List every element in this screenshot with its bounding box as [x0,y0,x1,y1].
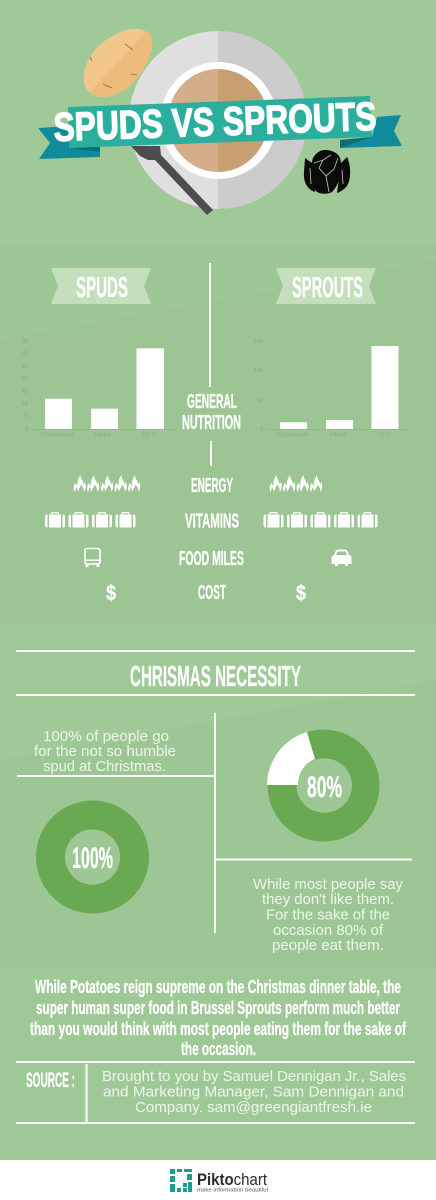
donut chart: 80 percent: 80% [307,771,342,804]
banner ribbon with title [38,95,402,159]
donut chart: 100 percent [50,815,134,899]
bar chart: sprouts: POTASSIUM [276,432,308,438]
label: energy: ENERGY [191,475,233,497]
icon: bus [85,548,100,567]
text: sprouts note: For the sake of the [266,908,390,924]
icons: spuds vitamin cases [45,512,136,528]
panel: comparison [22,263,410,605]
text: sprouts note: While most people say [253,877,404,893]
bar chart: sprouts: 0 [260,427,263,433]
icon: plate with soup [129,31,307,209]
panel: summary and source: SOURCE : [26,1069,75,1092]
text: spuds note [34,729,176,775]
bar chart: spuds: 25 [22,364,28,370]
ribbon heading: sprouts [276,268,376,304]
logo tagline: make information beautiful [197,1188,268,1194]
panel: christmas necessity [16,650,415,954]
footer: piktochart logo [170,1169,268,1194]
text: credits: Brought to you by Samuel Dennigan Jr., Sales [102,1069,406,1085]
text: credits: Company. sam@greengiantfresh.ie [135,1100,372,1116]
bar chart: spuds: 30 [22,351,28,357]
bar chart: sprouts: 50 [257,398,263,404]
bar chart: spuds: FIBER [95,432,111,438]
panel: summary and source [16,976,415,1124]
icon: logo mark [170,1169,192,1192]
label: general nutrition: GENERAL [187,391,237,413]
text: sprouts note [253,877,404,954]
bar chart: spuds: VIT C [142,432,156,438]
logo wordmark: Piktochart [197,1171,267,1189]
bar chart: spuds: 15 [22,389,28,395]
donut chart: 80 percent [267,732,365,827]
bar chart: sprouts [254,339,410,438]
text: conclusion: the occasion. [181,1038,256,1059]
icon: sprout [304,150,350,194]
label: vitamins: VITAMINS [185,510,239,532]
bar chart: sprouts: VIT C [377,432,391,438]
icon: potato [84,29,152,97]
icon: fork [131,146,213,215]
label: cost: COST [198,582,226,604]
bar chart: spuds: 10 [22,401,28,407]
bar chart: sprouts: 150 [254,339,263,345]
label: general nutrition [182,391,241,434]
label: food miles: FOOD MILES [179,548,244,570]
header illustration [38,29,402,215]
bar chart: spuds: 35 [22,339,28,345]
text: sprouts note: they don't like them. [262,892,394,908]
bar chart: sprouts: 100 [254,368,263,374]
bar chart: spuds: 0 [25,427,28,433]
icons: spuds energy flames [74,475,140,492]
text: sprouts note: people eat them. [272,938,384,954]
bar chart: sprouts: FIBER [330,432,346,438]
label: general nutrition: NUTRITION [182,412,241,434]
ribbon heading: spuds: SPUDS [76,272,128,304]
text: spuds note: for the not so humble [34,744,176,760]
text: sprouts note: occasion 80% of [273,923,384,939]
icons: sprouts vitamin cases [264,512,378,528]
text: spuds note: 100% of people go [43,729,169,745]
text: credits: and Marketing Manager, Sam Dennigan and [103,1084,404,1100]
ribbon heading: spuds [51,268,151,304]
icon: dollar spuds: $ [106,582,116,605]
icons: sprouts energy flames [270,475,322,492]
ribbon heading: sprouts: SPROUTS [292,272,363,304]
text: credits [102,1069,406,1116]
donut chart: 100 percent: 100% [72,842,113,875]
icon: car [332,550,352,566]
text: spuds note: spud at Christmas. [43,759,166,775]
icon: dollar sprouts: $ [296,582,306,605]
bar chart: spuds: POTASSIUM [41,432,73,438]
bar chart: spuds: 5 [25,414,28,420]
text: conclusion [30,976,407,1059]
bar chart: spuds: 20 [22,376,28,382]
bar chart: spuds [22,339,175,438]
